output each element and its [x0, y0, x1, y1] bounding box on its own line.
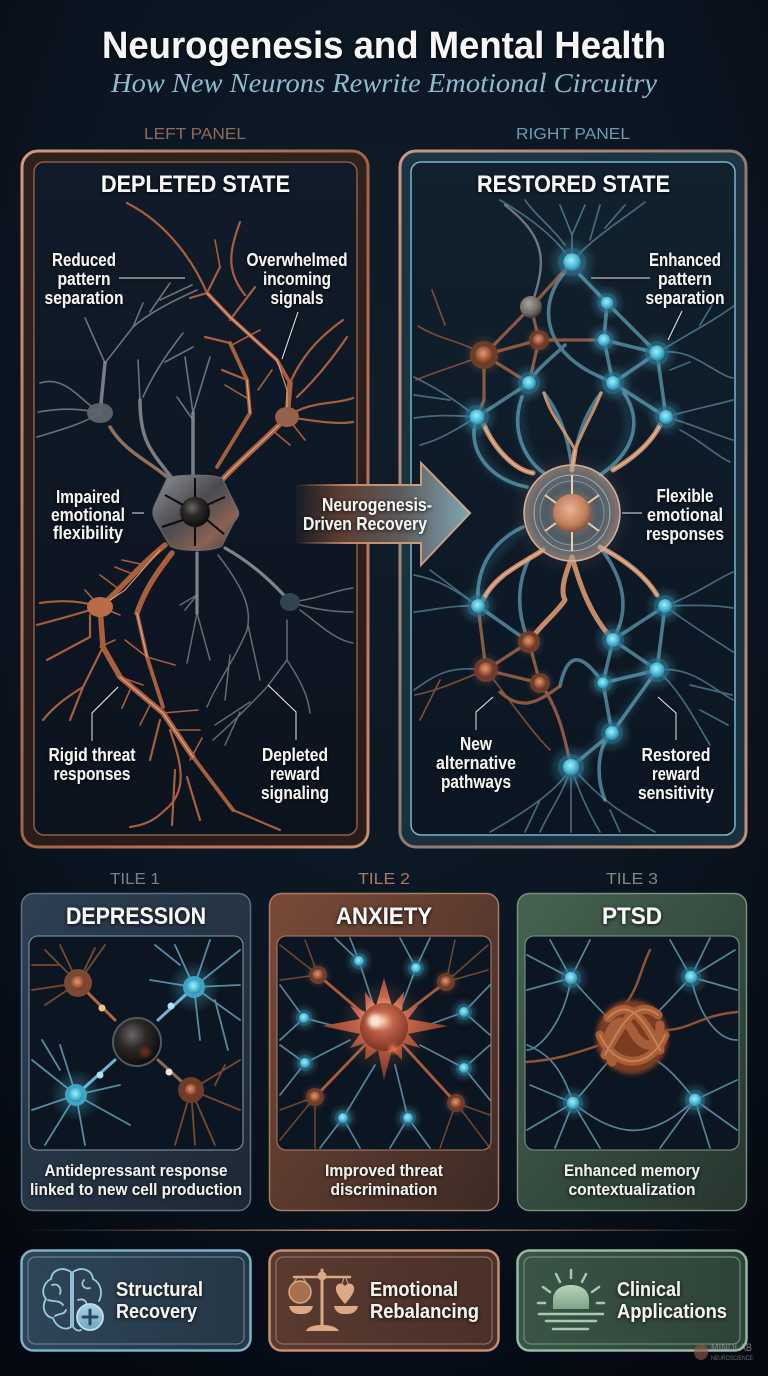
callout: overwhelmed incoming signals: incoming: [263, 269, 331, 289]
callout: restored reward sensitivity: reward: [652, 764, 700, 784]
tile illustration: anxiety: [277, 936, 491, 1150]
callout: new alternative pathways: [436, 697, 516, 792]
soma: cracked neuron: [153, 475, 239, 550]
card label: structural recovery: Structural: [116, 1279, 203, 1301]
bright copper petals: [483, 393, 660, 642]
watermark logo: NEUROSCIENCE: [711, 1356, 753, 1362]
callout: impaired emotional flexibility: [51, 487, 144, 543]
callout: enhanced pattern separation: Enhanced: [649, 250, 721, 270]
callout: restored reward sensitivity: [638, 697, 714, 803]
neural network: restored: [414, 200, 735, 832]
callout: depleted reward signaling: [261, 685, 329, 803]
small soma: copper: [275, 407, 299, 427]
card label: structural recovery: [116, 1279, 203, 1323]
left panel tag: LEFT PANEL: [144, 126, 246, 143]
callout: restored reward sensitivity: sensitivity: [638, 783, 714, 803]
tile caption: depression: Antidepressant response: [44, 1161, 228, 1180]
callout: reduced pattern separation: pattern: [58, 269, 110, 289]
tile caption: PTSD: [564, 1161, 700, 1199]
card: emotional rebalancing: [270, 1250, 498, 1350]
callout: new alternative pathways: New: [460, 734, 493, 754]
callout: flexible emotional responses: Flexible: [656, 486, 714, 506]
card: structural recovery: [22, 1250, 250, 1350]
tile caption: depression: [30, 1161, 242, 1199]
thin blue dendrites: [414, 200, 735, 832]
card label: structural recovery: Recovery: [116, 1301, 198, 1323]
icon: sunrise: [538, 1270, 604, 1329]
callout: reduced pattern separation: [44, 250, 185, 308]
tile heading: anxiety: ANXIETY: [336, 903, 432, 930]
callout: impaired emotional flexibility: emotional: [51, 505, 125, 525]
callout: rigid threat responses: responses: [54, 764, 130, 784]
thin copper dendrites: [415, 290, 550, 750]
card label: emotional rebalancing: Rebalancing: [370, 1301, 479, 1323]
tile caption: anxiety: discrimination: [330, 1180, 438, 1199]
callout: reduced pattern separation: Reduced: [52, 250, 116, 270]
tile illustration: depression: [29, 936, 243, 1150]
callout: restored reward sensitivity: Restored: [642, 745, 710, 765]
callout: enhanced pattern separation: pattern: [658, 269, 712, 289]
icon: brain with plus: [43, 1269, 103, 1331]
tile heading: PTSD: PTSD: [602, 903, 662, 930]
tile caption: PTSD: contextualization: [568, 1180, 696, 1199]
title: Neurogenesis and Mental Health: [102, 25, 666, 67]
callout: overwhelmed incoming signals: [246, 250, 348, 359]
glow under network: [476, 262, 666, 767]
copper connections: [477, 205, 604, 767]
callout: rigid threat responses: Rigid threat: [48, 745, 136, 765]
card label: emotional rebalancing: [370, 1279, 479, 1323]
tile 3 tag: TILE 3: [606, 871, 658, 888]
arrow label: [303, 495, 432, 534]
heading: depleted state: DEPLETED STATE: [101, 171, 290, 198]
arrow label: Driven Recovery: [303, 514, 427, 534]
watermark logo: MINDLAB: [711, 1342, 752, 1354]
tile caption: depression: linked to new cell production: [30, 1180, 242, 1199]
card label: emotional rebalancing: Emotional: [370, 1279, 458, 1301]
tile caption: anxiety: [325, 1161, 443, 1199]
callout: enhanced pattern separation: separation: [646, 288, 724, 308]
tile: depression: [22, 894, 250, 1210]
arrow: neurogenesis-driven recovery: [296, 463, 470, 565]
card: clinical applications: [518, 1250, 746, 1350]
tile: PTSD: [518, 894, 746, 1210]
tile caption: anxiety: Improved threat: [325, 1161, 443, 1180]
tile heading: depression: DEPRESSION: [66, 903, 206, 930]
callout: depleted reward signaling: signaling: [261, 783, 329, 803]
small soma: lower copper: [87, 597, 113, 617]
main blue connections: [474, 272, 666, 800]
icon: knot: [596, 1000, 668, 1074]
neuron nodes: [455, 237, 686, 790]
panel: restored state: [400, 151, 746, 847]
callout: new alternative pathways: pathways: [441, 772, 511, 792]
card label: clinical applications: Clinical: [617, 1279, 681, 1301]
heading: restored state: RESTORED STATE: [477, 171, 670, 198]
card label: clinical applications: Applications: [617, 1301, 727, 1323]
callout: impaired emotional flexibility: flexibility: [53, 523, 123, 543]
callout: flexible emotional responses: responses: [646, 524, 724, 544]
tile 1 tag: TILE 1: [110, 871, 160, 888]
tile 2 tag: TILE 2: [358, 871, 410, 888]
callout: depleted reward signaling: Depleted: [262, 745, 328, 765]
tile: anxiety: [270, 894, 498, 1210]
neuron: damaged network: [37, 203, 353, 830]
icon: balance scale: [289, 1270, 358, 1331]
soma: restored neuron: [510, 451, 634, 575]
arrow label: Neurogenesis-: [322, 495, 432, 515]
watermark logo: [694, 1342, 753, 1362]
tile illustration: PTSD: [525, 936, 739, 1150]
callout: flexible emotional responses: emotional: [647, 505, 723, 525]
callout: depleted reward signaling: reward: [270, 764, 320, 784]
tile caption: PTSD: Enhanced memory: [564, 1161, 700, 1180]
copper highlights: [100, 293, 287, 757]
right panel tag: RIGHT PANEL: [516, 126, 630, 143]
panel: depleted state: [22, 151, 368, 847]
callout: overwhelmed incoming signals: signals: [270, 288, 324, 308]
subtitle: How New Neurons Rewrite Emotional Circuitry: [110, 68, 657, 98]
callout: enhanced pattern separation: [591, 250, 724, 340]
callout: reduced pattern separation: separation: [44, 288, 124, 308]
callout: new alternative pathways: alternative: [436, 753, 516, 773]
copper dendrites: [37, 203, 353, 830]
callout: rigid threat responses: [48, 687, 136, 784]
callout: overwhelmed incoming signals: Overwhelmed: [246, 250, 348, 270]
small soma: lower grey: [280, 593, 300, 611]
callout: impaired emotional flexibility: Impaired: [56, 487, 120, 507]
callout: flexible emotional responses: [622, 486, 724, 544]
grey dendrites: [37, 283, 353, 745]
card label: clinical applications: [617, 1279, 727, 1323]
small soma: grey: [87, 403, 113, 423]
